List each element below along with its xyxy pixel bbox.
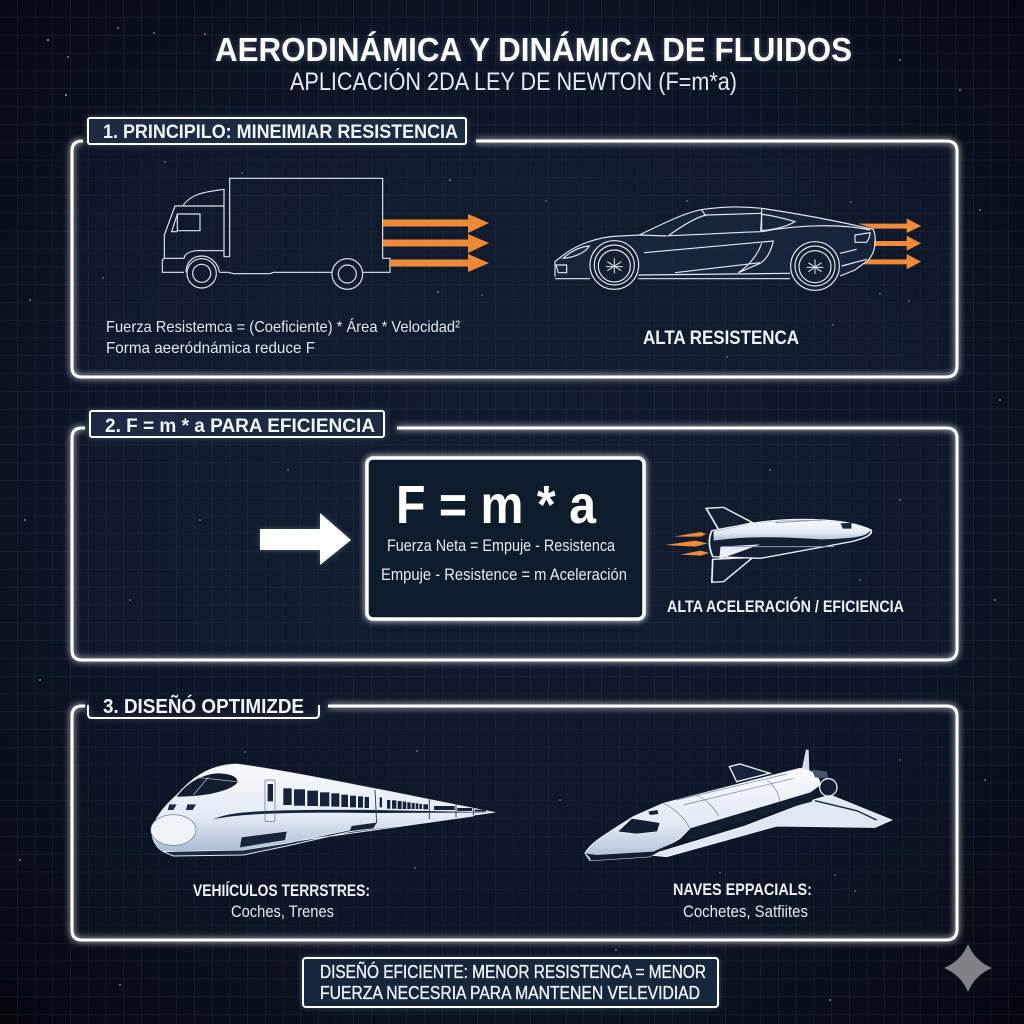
- formula text: Fuerza Resistemca = (Coeficiente) * Área * Velocidad²: [106, 317, 461, 336]
- icon: sparkle: [944, 944, 992, 992]
- subtitle: APLICACIÓN 2DA LEY DE NEWTON (F=m*a): [290, 67, 737, 96]
- panel heading: 1. PRINCIPILO: MINEIMIAR RESISTENCIA: [103, 122, 458, 143]
- panel: diseno: [72, 694, 957, 940]
- arrows: truck drag: [383, 214, 489, 272]
- label: naves: Cochetes, Satfiites: [683, 903, 808, 921]
- label: naves: [673, 881, 812, 921]
- label: alta aceleracion: ALTA ACELERACIÓN / EFICIENCIA: [667, 597, 904, 616]
- panel: principio: [72, 118, 957, 377]
- icon: space shuttle: [585, 749, 892, 861]
- formula box: Fuerza Neta = Empuje - Resistenca: [387, 537, 616, 555]
- arrows: car drag: [858, 218, 921, 269]
- icon: sports car: [555, 207, 921, 290]
- callout: conclusion: FUERZA NECESRIA PARA MANTENEN VELEVIDIAD: [320, 983, 700, 1003]
- arrow: white: [260, 513, 351, 565]
- callout: conclusion: [303, 958, 718, 1007]
- formula text: [106, 317, 461, 357]
- label: vehiculos: Coches, Trenes: [231, 903, 334, 921]
- icon: truck: [162, 178, 390, 289]
- formula box: Empuje - Resistence = m Aceleración: [381, 566, 627, 584]
- title: AERODINÁMICA Y DINÁMICA DE FLUIDOS: [215, 31, 852, 68]
- formula text: Forma aeeródnámica reduce F: [106, 340, 315, 357]
- label: vehiculos: [193, 881, 370, 921]
- label: vehiculos: VEHIÍCULOS TERRSTRES:: [193, 881, 370, 900]
- icon: rocket: [665, 507, 871, 582]
- formula box: [367, 458, 644, 619]
- panel: F=m*a: [72, 411, 957, 660]
- callout: conclusion: DISEÑÓ EFICIENTE: MENOR RESISTENCA = MENOR: [320, 961, 706, 982]
- panel heading: 3. DISEÑÓ OPTIMIZDE: [103, 694, 304, 718]
- panel heading: 2. F = m * a PARA EFICIENCIA: [105, 415, 375, 437]
- label: alta resistencia: ALTA RESISTENCA: [643, 328, 799, 349]
- icon: train: [151, 764, 495, 856]
- formula box: F = m * a: [396, 475, 597, 535]
- label: naves: NAVES EPPACIALS:: [673, 881, 812, 899]
